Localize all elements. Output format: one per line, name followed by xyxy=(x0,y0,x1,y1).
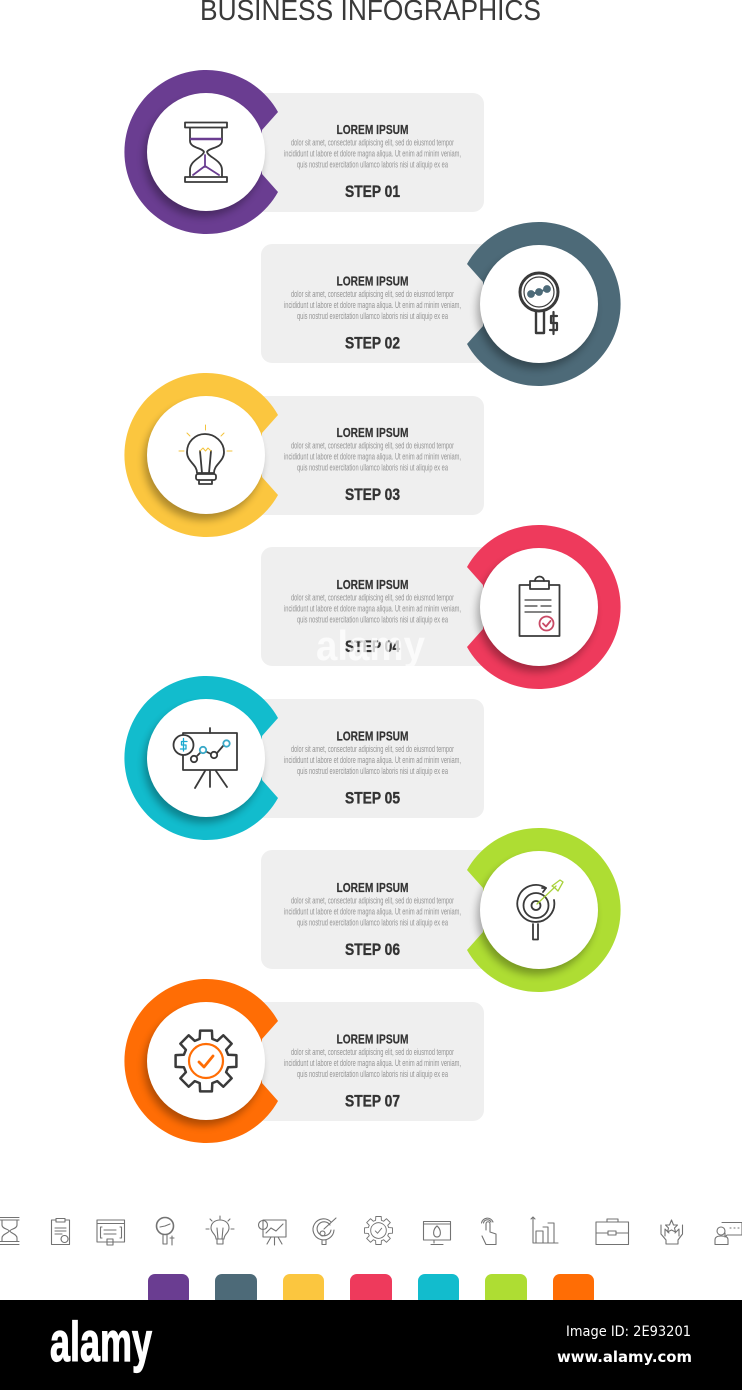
white disc: step 04 xyxy=(480,548,598,666)
small icon: magnifier xyxy=(160,1224,174,1245)
body text: step 06: quis nostrud exercitation ullamco laboris nisi ut aliquip ex ea xyxy=(297,918,448,928)
icon: target with arrow xyxy=(517,880,563,940)
body text: step 07 xyxy=(284,1047,461,1079)
step 03 xyxy=(124,373,484,537)
white disc: step 07 xyxy=(147,1002,265,1120)
small icon: briefcase xyxy=(596,1219,628,1244)
body text: step 04: incididunt ut labore et dolore magna aliqua. Ut enim ad minim veniam, xyxy=(284,603,461,613)
body text: step 05: dolor sit amet, consectetur adipiscing elit, sed do eiusmod tempor xyxy=(291,744,454,754)
shadow: step 03 xyxy=(144,402,262,520)
label: step 03: STEP 03 xyxy=(345,485,400,504)
step 05 xyxy=(124,676,484,840)
heading: step 01: LOREM IPSUM xyxy=(336,122,408,137)
body text: step 01: incididunt ut labore et dolore magna aliqua. Ut enim ad minim veniam, xyxy=(284,148,461,158)
footer background xyxy=(0,1300,742,1390)
icon: presentation board xyxy=(174,728,237,788)
step 07 xyxy=(124,979,484,1143)
body text: step 04: quis nostrud exercitation ullamco laboris nisi ut aliquip ex ea xyxy=(297,614,448,624)
panel: step 07 xyxy=(240,1002,484,1121)
icon: light bulb xyxy=(179,425,232,484)
body text: step 04: dolor sit amet, consectetur adipiscing elit, sed do eiusmod tempor xyxy=(291,592,454,602)
icon row xyxy=(0,1216,742,1245)
icon: gear with check xyxy=(176,1031,236,1091)
small icon: certificate browser xyxy=(97,1220,124,1245)
shadow: step 05 xyxy=(144,705,262,823)
image id: Image ID: 2E93201 xyxy=(566,1324,691,1340)
ring: step 05 xyxy=(124,676,278,840)
panel: step 02 xyxy=(261,244,511,363)
label: step 07: STEP 07 xyxy=(345,1092,400,1111)
swatch: yellow xyxy=(283,1274,324,1306)
swatch: cyan xyxy=(418,1274,459,1306)
body text: step 01: quis nostrud exercitation ullamco laboris nisi ut aliquip ex ea xyxy=(297,160,448,170)
small icon: target xyxy=(313,1218,336,1244)
ring: step 06 xyxy=(467,828,621,992)
ring: step 07 xyxy=(124,979,278,1143)
shadow: step 02 xyxy=(477,251,595,369)
panel: step 04 xyxy=(261,547,511,666)
heading: step 03: LOREM IPSUM xyxy=(336,425,408,440)
body text: step 05: quis nostrud exercitation ullamco laboris nisi ut aliquip ex ea xyxy=(297,766,448,776)
body text: step 07: quis nostrud exercitation ullamco laboris nisi ut aliquip ex ea xyxy=(297,1069,448,1079)
white disc: step 03 xyxy=(147,396,265,514)
step 06 xyxy=(261,828,621,992)
step 01 xyxy=(124,70,484,234)
small icon: bar chart xyxy=(531,1217,558,1243)
panel: step 06 xyxy=(261,850,511,969)
icon: hourglass xyxy=(185,122,227,182)
panel: step 01 xyxy=(240,93,484,212)
footer bar xyxy=(0,1300,742,1390)
body text: step 07: dolor sit amet, consectetur adipiscing elit, sed do eiusmod tempor xyxy=(291,1047,454,1057)
body text: step 01: dolor sit amet, consectetur adipiscing elit, sed do eiusmod tempor xyxy=(291,138,454,148)
small icon: magnifier lens xyxy=(156,1218,174,1234)
body text: step 02: incididunt ut labore et dolore magna aliqua. Ut enim ad minim veniam, xyxy=(284,300,461,310)
swatch: red xyxy=(350,1274,392,1306)
small icon: monitor with money bag xyxy=(424,1222,450,1244)
body text: step 03: quis nostrud exercitation ullamco laboris nisi ut aliquip ex ea xyxy=(297,463,448,473)
label: step 02: STEP 02 xyxy=(345,334,400,353)
body text: step 06: dolor sit amet, consectetur adipiscing elit, sed do eiusmod tempor xyxy=(291,896,454,906)
icon: magnifier with dollar xyxy=(520,273,558,334)
website: www.alamy.com xyxy=(557,1348,692,1366)
heading: step 05: LOREM IPSUM xyxy=(336,728,408,743)
white disc: step 01 xyxy=(147,93,265,211)
body text: step 06: incididunt ut labore et dolore magna aliqua. Ut enim ad minim veniam, xyxy=(284,906,461,916)
label: step 05: STEP 05 xyxy=(345,788,400,807)
small icon: touch hand xyxy=(482,1218,496,1244)
shadow: step 04 xyxy=(477,554,595,672)
step 02 xyxy=(261,222,621,386)
body text: step 07: incididunt ut labore et dolore magna aliqua. Ut enim ad minim veniam, xyxy=(284,1058,461,1068)
small icon: presentation board xyxy=(263,1220,286,1245)
swatch: green xyxy=(485,1274,527,1306)
body text: step 04 xyxy=(284,592,461,624)
heading: step 06: LOREM IPSUM xyxy=(336,880,408,895)
panel: step 05 xyxy=(240,699,484,818)
small icon: clipboard xyxy=(52,1218,70,1244)
white disc: step 05 xyxy=(147,699,265,817)
step 04 xyxy=(261,525,621,689)
body text: step 02: dolor sit amet, consectetur adipiscing elit, sed do eiusmod tempor xyxy=(291,289,454,299)
body text: step 02 xyxy=(284,289,461,321)
icon: clipboard xyxy=(520,576,560,636)
body text: step 05 xyxy=(284,744,461,776)
swatch: purple xyxy=(148,1274,189,1306)
colour swatches xyxy=(148,1274,594,1306)
small icon: hands with star xyxy=(661,1220,682,1244)
small icon: dollar circle xyxy=(258,1220,268,1230)
body text: step 03: incididunt ut labore et dolore magna aliqua. Ut enim ad minim veniam, xyxy=(284,452,461,462)
heading: step 07: LOREM IPSUM xyxy=(336,1032,408,1047)
body text: step 06 xyxy=(284,896,461,928)
watermark: alamy xyxy=(316,622,426,669)
shadow: step 07 xyxy=(144,1008,262,1126)
body text: step 03 xyxy=(284,441,461,473)
shadow: step 01 xyxy=(144,99,262,217)
shadow: step 06 xyxy=(477,857,595,975)
small icon: gear xyxy=(365,1217,392,1244)
panel: step 03 xyxy=(240,396,484,515)
ring: step 01 xyxy=(124,70,278,234)
logo: alamy: alamy xyxy=(50,1310,152,1373)
swatch: slate xyxy=(215,1274,257,1306)
ring: step 02 xyxy=(467,222,621,386)
heading: step 04: LOREM IPSUM xyxy=(336,577,408,592)
white disc: step 06 xyxy=(480,851,598,969)
heading: step 02: LOREM IPSUM xyxy=(336,274,408,289)
ring: step 04 xyxy=(467,525,621,689)
body text: step 01 xyxy=(284,138,461,170)
label: step 04: STEP 04 xyxy=(345,637,400,656)
small icon: hourglass xyxy=(0,1218,19,1244)
white disc: step 02 xyxy=(480,245,598,363)
body text: step 05: incididunt ut labore et dolore magna aliqua. Ut enim ad minim veniam, xyxy=(284,755,461,765)
ring: step 03 xyxy=(124,373,278,537)
swatch: orange xyxy=(553,1274,594,1306)
label: step 01: STEP 01 xyxy=(345,182,400,201)
body text: step 03: dolor sit amet, consectetur adipiscing elit, sed do eiusmod tempor xyxy=(291,441,454,451)
small icon: bulb xyxy=(206,1216,234,1244)
small icon: person with chat xyxy=(715,1222,742,1244)
body text: step 02: quis nostrud exercitation ullamco laboris nisi ut aliquip ex ea xyxy=(297,311,448,321)
label: step 06: STEP 06 xyxy=(345,940,400,959)
